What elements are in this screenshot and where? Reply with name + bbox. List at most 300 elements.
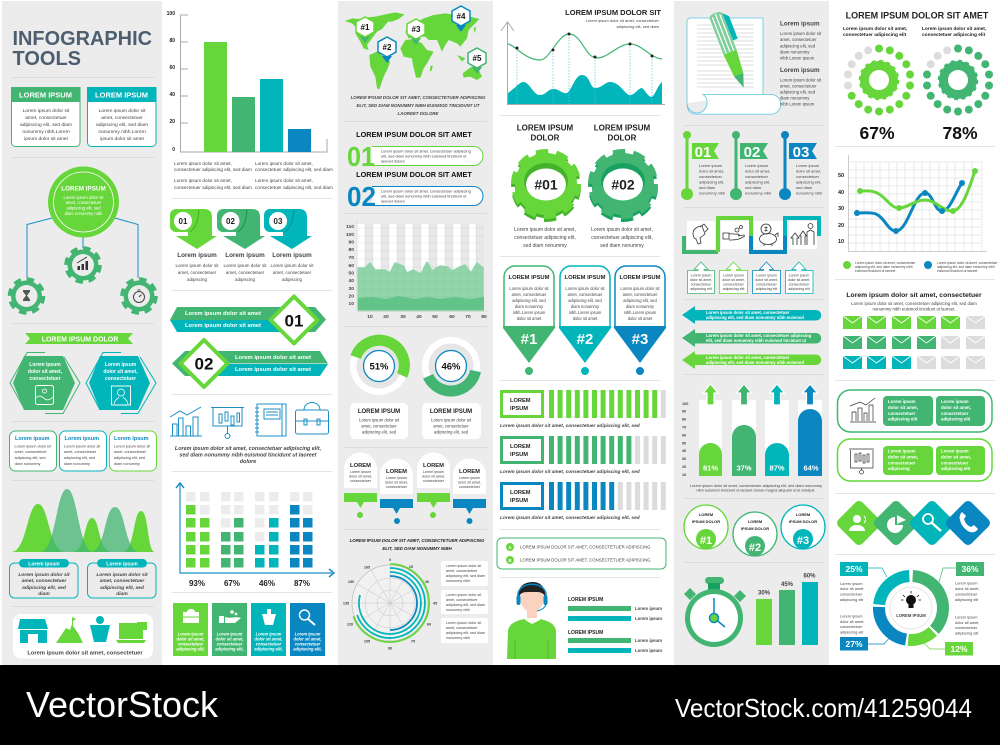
icon: piggy bank	[760, 224, 778, 246]
icon: chart gear	[66, 248, 100, 282]
title: INFOGRAPHIC	[12, 27, 152, 50]
legend: line chart: Lorem ipsum dolor sit amet, consectetuer	[855, 261, 916, 265]
panel: teal hexagon	[86, 352, 156, 414]
progress row: green: IPSUM	[510, 406, 528, 412]
donut cards: adipiscing elit, sed	[434, 430, 469, 434]
text: paper notes: Lorem ipsum	[780, 67, 820, 74]
marker 4: #4	[457, 12, 466, 21]
bar chart: four column: 0	[172, 147, 175, 153]
pin 03: adipiscing elit,	[796, 180, 821, 184]
text: bar chart notes: consectetuer adipiscing elit, sed diam	[255, 185, 333, 190]
heading: gears column: Lorem ipsum dolor sit amet,	[843, 26, 908, 32]
badge #1: #1	[700, 535, 712, 547]
text: map caption: LOREM IPSUM DOLOR SIT AMET, CONSECTETUER ADIPISCING	[351, 95, 486, 100]
note 4: consectetuer	[789, 282, 810, 286]
tile 1: consectetuer	[178, 642, 204, 646]
arrow 03: adipiscing	[282, 277, 303, 282]
pointer 4: Lorem ipsum	[459, 476, 480, 480]
icon: briefcase	[296, 402, 328, 434]
chart: layered area: 100	[346, 232, 354, 238]
world map with markers	[345, 6, 486, 89]
panel: green hexagon	[10, 352, 80, 414]
arrow 01: adipiscing	[187, 277, 208, 282]
chart: rounded bars with arrows: 90	[682, 410, 686, 414]
donut cards	[350, 403, 481, 439]
tile 2	[212, 603, 247, 656]
tile 1	[173, 603, 208, 656]
numbered statement 01: 01	[347, 141, 375, 172]
arrow 02: amet, consectetuer	[226, 270, 265, 275]
icon: stopwatch	[684, 577, 746, 647]
gear #01: DOLOR	[531, 134, 560, 142]
tile 3: consectetuer	[256, 642, 282, 646]
legend: line chart: adipiscing elit, sed diam nonummy nibh	[937, 265, 995, 269]
card 3: adipiscing elit, sed	[114, 456, 145, 460]
pointer card 3: diam nonummy	[626, 304, 655, 309]
pointer 2: dolor sit amet,	[385, 480, 408, 484]
arrow banner: teal: Lorem ipsum dolor sit amet, consectetuer	[706, 310, 790, 315]
card left: Lorem ipsum dolor sit	[18, 572, 70, 578]
text: italic statement: Lorem ipsum dolor sit amet, consectetuer adipiscing elit,	[175, 446, 322, 452]
panel: presentation icon card: dolor sit amet,	[941, 454, 971, 460]
tile 3: Lorem ipsum	[256, 632, 282, 636]
pointer 1: dolor sit amet,	[349, 474, 372, 478]
pin 01	[681, 131, 725, 200]
pointer card 3	[614, 266, 666, 375]
panel: chart icon card: adipiscing elit	[888, 416, 918, 422]
text: paper notes: Lorem ipsum dolor sit	[780, 31, 822, 36]
heading: envelopes: Lorem ipsum dolor sit amet, consectetuer	[846, 292, 982, 299]
badge #2: #2	[749, 542, 761, 554]
panel: presentation icon card: consectetuer	[941, 460, 969, 466]
icon: growth people	[791, 224, 814, 245]
chart: rounded bars with arrows: 70	[682, 426, 686, 430]
pin 03: sed diam	[796, 185, 813, 190]
bars: person stats: Lorem ipsum	[635, 616, 662, 621]
panel: presentation icon card: Lorem ipsum	[888, 448, 916, 454]
chart: layered area	[346, 220, 488, 320]
card: green: adipiscing elit, sed diam	[20, 122, 72, 128]
callout: 25%	[840, 562, 887, 602]
panel: business icons with zigzag	[684, 218, 819, 252]
pointer card 1: diam nonummy	[515, 304, 544, 309]
card 1: amet, consectetuer	[14, 450, 48, 454]
heading: wave chart: LOREM IPSUM DOLOR SIT	[565, 8, 661, 17]
text: paper notes: diam nonummy	[780, 50, 810, 54]
chart: two-series line chart: 20	[838, 223, 844, 229]
card 1	[10, 431, 56, 471]
pointer 4	[453, 459, 486, 524]
heading: envelopes	[846, 292, 982, 312]
arrow 02: Lorem ipsum dolor sit	[223, 263, 267, 268]
panel: presentation icon card: Lorem ipsum	[941, 448, 969, 454]
panel: radial notes: nonummy nibh	[446, 579, 470, 583]
card left: diam	[38, 591, 50, 597]
badge #3: #3	[797, 535, 809, 547]
donut 51%: 51%	[369, 362, 389, 372]
icon: store	[18, 619, 48, 643]
chart: layered area: 110	[346, 224, 354, 230]
chart: radial arcs: 75	[411, 640, 415, 644]
arrow banner: dark green: elit, sed diam nonummy nibh euismod tincidunt ut	[706, 338, 807, 343]
card 3: Lorem ipsum	[114, 436, 149, 442]
chart: radial arcs: 105	[364, 640, 370, 644]
card: teal: LOREM IPSUM	[95, 90, 148, 100]
callout: 12%: dolor sit amet,	[955, 620, 979, 625]
panel: green hexagon: Lorem ipsum	[29, 362, 61, 368]
panel: two header cards	[11, 87, 156, 146]
numbered statement 02: LOREM IPSUM DOLOR SIT AMET	[356, 170, 472, 179]
heading: gears column: consectetuer adipiscing elit	[922, 32, 986, 38]
dial 67%	[844, 44, 914, 143]
pointer 3: consectetuer	[423, 479, 445, 483]
icon: pen	[708, 9, 755, 90]
text: bar chart notes: Lorem ipsum dolor sit amet,	[255, 161, 313, 166]
callout: 27%: adipiscing elit	[840, 630, 864, 634]
card 3: diam nonummy	[114, 462, 140, 466]
note 4: adipiscing elit	[788, 287, 810, 291]
callout: 12%	[924, 614, 979, 656]
arrow banner: dark green: Lorem ipsum dolor sit amet, consectetuer adipiscing	[706, 333, 812, 338]
text: paper notes: adipiscing elit, sed	[780, 44, 816, 48]
arrow 02: 02	[226, 217, 235, 226]
panel: radial notes: amet, consectetuer	[446, 598, 478, 602]
callout: 12%: Lorem ipsum	[955, 614, 978, 620]
pin 02	[730, 131, 771, 200]
heading: envelopes: Lorem ipsum dolor sit amet, consectetuer adipiscing elit, sed diam	[851, 301, 977, 306]
arrow 03: Lorem ipsum	[272, 252, 312, 259]
progress row: dark green: IPSUM	[510, 452, 528, 458]
chart: square pictogram columns: 87%	[294, 579, 310, 588]
chart: square pictogram columns: 46%	[259, 579, 275, 588]
heading: gears column: consectetuer adipiscing elit	[843, 32, 907, 38]
dial 78%: 78%	[942, 123, 978, 143]
panel: green hexagon: consectetuer	[29, 376, 61, 382]
chart: layered area: 70	[465, 314, 471, 320]
pin 03	[779, 131, 822, 200]
hub circle: diam nonummy nibh	[65, 211, 103, 216]
text: paper notes: adipiscing elit, sed	[780, 90, 816, 94]
icon: image	[36, 386, 54, 404]
arrow banner: teal: adipiscing elit, sed diam nonummy nibh euismod	[706, 315, 804, 320]
pointer card 3: nibh.Lorem ipsum	[624, 310, 657, 315]
chart: segmented donut	[879, 576, 943, 640]
bar chart: three bars: 30%	[758, 590, 771, 596]
pin 03: 03	[793, 144, 809, 161]
chart: radial arcs: 30	[425, 580, 429, 584]
card right	[88, 559, 156, 598]
pointer card 2	[559, 266, 611, 375]
chart: rounded bars with arrows: Lorem ipsum dolor sit amet, consectetuer adipiscing elit, sed diam nonummy	[690, 483, 822, 488]
panel: radial notes: adipiscing elit, sed diam	[446, 631, 485, 635]
chart: radial arcs: 150	[348, 580, 354, 584]
callout: 36%: consectetuer	[955, 592, 978, 596]
note 1: Lorem ipsum	[691, 274, 711, 278]
pin 01: dolor sit amet,	[699, 168, 724, 174]
chart: layered area: 20	[349, 294, 354, 300]
chart: layered area: 10	[349, 301, 354, 307]
text: paper notes: amet, consectetuer	[780, 37, 817, 42]
text: bar chart notes: consectetuer adipiscing elit, sed diam	[174, 167, 252, 172]
icon: hand and coins	[723, 226, 744, 240]
text: map caption: LAOREET DOLORE	[398, 111, 440, 116]
pointer card 2: Lorem ipsum dolor sit	[565, 286, 605, 291]
note 2: dolor sit amet,	[722, 278, 745, 282]
icon: notebook	[255, 404, 286, 436]
marker 2: #2	[383, 43, 392, 52]
card: teal: nonummy nibh.Lorem	[98, 129, 146, 135]
pin 01: nonummy nibh	[699, 190, 725, 196]
chart: layered area: 50	[432, 314, 438, 320]
panel: chart icon card	[838, 390, 992, 432]
card right: Lorem ipsum	[106, 562, 138, 568]
callout: 36%: dolor sit amet,	[955, 586, 979, 591]
chart: rounded bars with arrows: 37%	[736, 464, 752, 472]
tile 1: Lorem ipsum	[178, 632, 204, 636]
text: bar chart notes: Lorem ipsum dolor sit amet,	[255, 178, 313, 183]
pointer card 1: nibh.Lorem ipsum	[513, 310, 546, 315]
card: teal	[87, 87, 156, 146]
dial 67%: 67%	[859, 123, 895, 143]
note 4: Lorem ipsum	[789, 274, 809, 278]
card 1: Lorem ipsum	[15, 436, 50, 442]
gear #02: consectetuer adipiscing elit,	[591, 235, 653, 241]
gear #02: DOLOR	[608, 134, 637, 142]
panel: icon strip card	[13, 614, 153, 658]
tile 2: consectetuer	[217, 642, 243, 646]
callout: 27%: 27%	[845, 639, 863, 649]
card right: Lorem ipsum dolor sit	[96, 572, 148, 578]
card 1: adipiscing elit, sed	[14, 456, 46, 460]
text: italic statement: dolore	[240, 459, 256, 465]
numbered statement 02: 02	[347, 181, 376, 212]
card: green: LOREM IPSUM	[19, 90, 72, 100]
badge #2	[733, 512, 777, 556]
text: bar chart notes: consectetuer adipiscing elit, sed diam	[174, 185, 252, 190]
gear #01: sed diam nonummy	[523, 243, 567, 249]
chart: layered area: 50	[349, 270, 354, 276]
card 2: adipiscing elit, sed	[64, 456, 95, 460]
pointer 1: consectetuer	[350, 479, 372, 483]
panel: radial notes: Lorem ipsum dolor sit	[446, 564, 481, 568]
panel: three small text cards	[10, 431, 156, 471]
panel: colored tiles	[173, 603, 325, 656]
panel: teal hexagon: dolor sit amet,	[103, 369, 138, 375]
panel: radial notes: adipiscing elit, sed diam	[446, 574, 485, 578]
illustration: headset person	[507, 582, 556, 659]
hub circle: amet, consectetuer	[66, 200, 102, 205]
tile 3	[251, 603, 286, 656]
bars: person stats: LOREM IPSUM	[568, 630, 603, 636]
donut 46%	[422, 337, 480, 395]
panel: chart icon card: consectetuer	[941, 411, 969, 416]
pin 02: 02	[744, 144, 760, 161]
badge #1: LOREM	[699, 512, 714, 517]
arrow 03	[264, 209, 314, 282]
numbered statement 01	[347, 130, 483, 172]
pointer card 3: amet, consectetuer	[623, 292, 658, 297]
pointer card 1: #1	[521, 331, 537, 348]
panel: presentation icon card: consectetuer	[888, 460, 916, 466]
pointer card 1: amet, consectetuer	[512, 292, 547, 297]
pointer card 3: adipiscing elit, sed	[623, 298, 657, 303]
bar chart: four column: 100	[167, 11, 175, 17]
donut cards: amet, consectetuer	[433, 424, 469, 428]
card left: Lorem ipsum	[28, 562, 60, 568]
card: teal: Lorem ipsum dolor sit	[99, 108, 146, 114]
watermark footer band: VectorStock	[26, 684, 219, 725]
bar chart: four column	[167, 11, 327, 153]
text: paper notes: nibh.Lorem ipsum	[780, 56, 815, 60]
pin 01: consectetuer	[699, 174, 723, 179]
bars: person stats: LOREM IPSUM	[568, 597, 603, 603]
card 1: Lorem ipsum dolor sit	[14, 444, 52, 448]
title: TOOLS	[12, 47, 81, 70]
gear #01: Lorem ipsum dolor sit amet,	[514, 227, 576, 233]
panel: presentation icon card	[838, 439, 992, 481]
bar chart: three bars: 60%	[803, 574, 816, 580]
pointer card 2: nibh.Lorem ipsum	[569, 310, 602, 315]
chart: rounded bars with arrows: 60	[682, 434, 686, 438]
chart: rounded bars with arrows: 100	[682, 402, 688, 406]
numbered statement 01: laoreet dolore	[381, 158, 405, 164]
icon: light bulb	[901, 591, 921, 608]
tile 2: dolor sit amet,	[216, 636, 243, 642]
note 3: Lorem ipsum	[756, 274, 777, 278]
card: green: amet, consectetuer	[25, 115, 67, 121]
callout: 12%: adipiscing elit	[955, 630, 979, 636]
arrow 03: 03	[274, 217, 283, 226]
panel: pointer cards #1 #2 #3	[503, 266, 666, 375]
card right: diam	[116, 591, 128, 597]
tile 2: adipiscing elit,	[215, 646, 244, 652]
numbered statement 02: laoreet dolore	[381, 198, 405, 204]
card 2: Lorem ipsum	[64, 436, 99, 442]
panel: presentation icon card: dolor sit amet,	[888, 454, 918, 460]
card 3	[110, 431, 156, 471]
pointer card 2: diam nonummy	[571, 304, 600, 309]
chart: radial arcs: 165	[364, 566, 370, 570]
chart: layered area: 60	[449, 314, 455, 320]
marker 5: #5	[473, 54, 482, 63]
tile 1: adipiscing elit,	[176, 646, 205, 652]
chart: layered area: 20	[383, 314, 389, 320]
icon: line chart	[170, 407, 202, 436]
donut cards: adipiscing elit, sed	[362, 430, 397, 434]
hub circle: adipiscing elit, sed	[66, 206, 101, 210]
pin 01: Lorem ipsum	[699, 163, 723, 168]
numbered statement 01: Lorem ipsum dolor sit amet, consectetuer adipiscing	[381, 148, 471, 154]
pointer card 1	[503, 266, 555, 375]
numbered statement 01: elit, sed diam nonummy nibh euismod tincidunt ut	[381, 154, 467, 158]
pointer 2: LOREM	[386, 469, 407, 475]
panel: down arrows 01 02 03	[170, 209, 314, 282]
pointer card 1: LOREM IPSUM	[509, 275, 550, 281]
panel: A B legend card	[497, 538, 666, 569]
callout: 36%: Lorem ipsum	[955, 580, 978, 586]
progress row: blue: LOREM	[510, 490, 531, 496]
gear #02	[591, 124, 655, 249]
marker 1: #1	[361, 23, 370, 32]
pointer card 2: adipiscing elit, sed	[568, 298, 602, 303]
card: teal: amet, consectetuer	[101, 115, 143, 121]
pointer card 1: dolor sit amet	[517, 316, 542, 321]
pointer 3: LOREM	[423, 463, 444, 469]
chart: rounded bars with arrows: 10	[682, 473, 686, 477]
heading: wave chart	[565, 8, 661, 29]
chart: two-series line chart: 30	[838, 206, 844, 212]
panel: A B legend card: LOREM IPSUM DOLOR SIT AMET, CONSECTETUER ADIPISCING	[520, 544, 651, 550]
arrow 03: Lorem ipsum dolor sit	[270, 263, 314, 268]
bar chart: four column: 20	[169, 119, 175, 125]
icon: podium speaker	[90, 616, 110, 642]
panel: A B legend card: LOREM IPSUM DOLOR SIT AMET, CONSECTETUER ADIPISCING	[520, 558, 651, 562]
diamond: pie chart	[872, 499, 920, 547]
panel: chart icon card: consectetuer	[888, 411, 916, 416]
panel: chart icon card: Lorem ipsum	[888, 399, 916, 404]
text: paper notes: Lorem ipsum dolor sit	[780, 78, 822, 82]
chart: layered area: 90	[349, 240, 354, 246]
pointer 1: Lorem ipsum	[350, 470, 371, 474]
card 3: amet, consectetuer	[114, 450, 147, 454]
note 3	[752, 262, 780, 294]
donut cards: Lorem ipsum dolor sit	[431, 418, 472, 422]
ribbon 02	[172, 340, 328, 387]
panel: chart icon card: dolor sit amet,	[888, 405, 918, 410]
panel: arrow note cards	[688, 262, 813, 294]
panel: chart icon card: adipiscing elit	[941, 416, 971, 422]
chart: two-series line chart: 40	[838, 190, 844, 196]
chart: layered area: 40	[349, 278, 354, 284]
pointer card 3: Lorem ipsum dolor sit	[620, 286, 660, 291]
tile 4: consectetuer	[295, 642, 321, 646]
heading: radial chart: LOREM IPSUM DOLOR SIT AMET, CONSECTETUER ADIPISCING	[350, 538, 485, 543]
panel: chart icon card: dolor sit amet,	[941, 405, 971, 410]
pointer 1	[344, 453, 377, 518]
legend: line chart: euismod tincidunt ut laoreet	[937, 269, 977, 273]
pointer card 2: #2	[577, 331, 593, 348]
badge #2: LOREM	[748, 519, 763, 524]
note 3: adipiscing elit	[756, 287, 777, 291]
arrow banner: green	[682, 351, 821, 369]
arrow banner: teal	[682, 306, 821, 324]
bar chart: four column: 40	[169, 92, 175, 98]
gear #02: sed diam nonummy	[600, 243, 644, 249]
note 2: adipiscing elit	[723, 287, 744, 291]
tile 4	[290, 603, 325, 656]
panel: teal hexagon: consectetuer	[105, 376, 136, 382]
badge #3: LOREM	[796, 512, 811, 517]
panel: chart icon card: Lorem ipsum	[941, 399, 969, 404]
donut cards: LOREM IPSUM	[358, 409, 400, 415]
text: paper notes: Lorem ipsum	[780, 20, 820, 28]
card left: amet, consectetuer	[22, 578, 67, 584]
progress row: green: LOREM	[510, 398, 531, 404]
pictogram: envelope grid	[843, 316, 985, 369]
icon: presentation board	[211, 408, 244, 438]
bars: person stats: Lorem ipsum	[635, 648, 662, 653]
pin 01: 01	[695, 144, 711, 161]
marker 4	[452, 6, 470, 32]
bars: person stats: Lorem ipsum	[635, 638, 662, 643]
card 2	[60, 431, 106, 471]
watermark footer band: VectorStock.com/41259044	[675, 693, 972, 723]
panel: radial notes: Lorem ipsum dolor sit	[446, 621, 481, 625]
panel: diamond icons	[835, 499, 992, 547]
chart: square pictogram columns: 67%	[224, 579, 240, 588]
panel: presentation icon card: adipiscing elit	[941, 466, 971, 471]
pin 02: sed diam	[745, 185, 762, 190]
